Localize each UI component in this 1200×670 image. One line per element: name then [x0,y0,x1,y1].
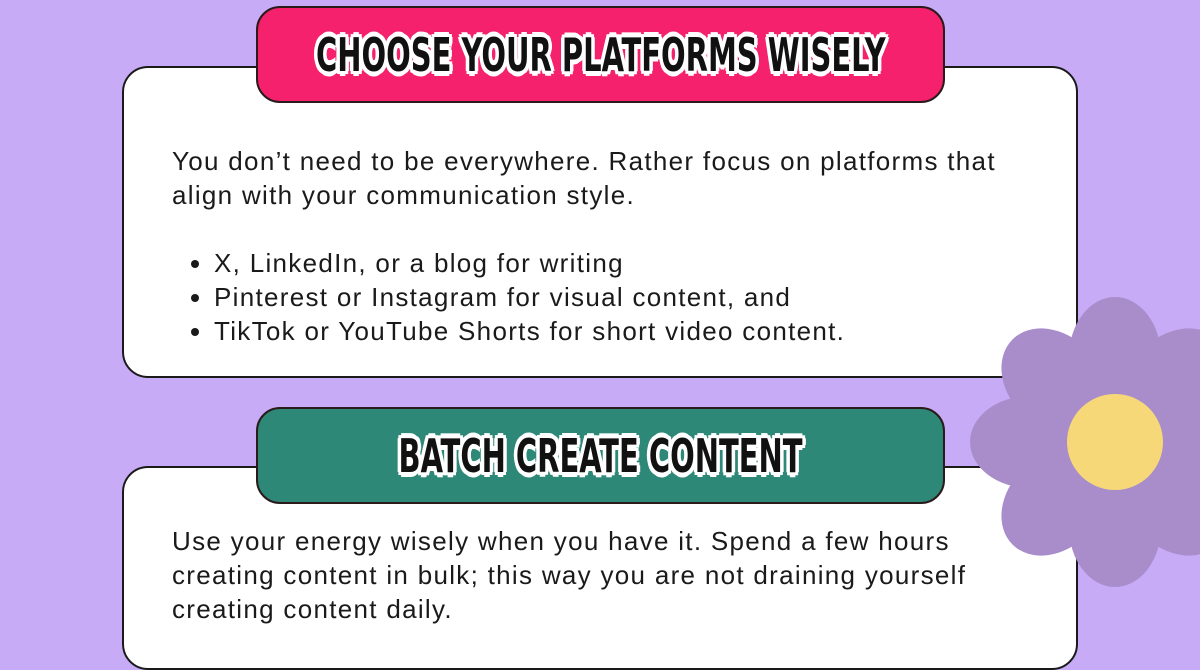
heading: choose your platforms wisely: CHOOSE YOUR PLATFORMS WISELY [316,28,885,82]
heading: choose your platforms wisely [256,6,945,103]
panel: choose platforms [122,66,1078,378]
text block: platforms intro and bullets: You don’t need to be everywhere. Rather focus on platforms that [172,146,996,176]
text block: platforms intro and bullets: TikTok or YouTube Shorts for short video content. [214,316,845,346]
icon: flower [970,297,1200,587]
text block: platforms intro and bullets: X, LinkedIn, or a blog for writing [214,248,624,278]
text block: platforms intro and bullets: Pinterest or Instagram for visual content, and [214,282,791,312]
panel: batch create [122,466,1078,670]
text block: platforms intro and bullets [172,146,996,346]
text block: batch create: creating content in bulk; this way you are not draining yourself [172,560,966,590]
text block: batch create: creating content daily. [172,594,453,624]
text block: batch create: Use your energy wisely when you have it. Spend a few hours [172,526,950,556]
text block: batch create [172,526,966,624]
heading: batch create content [256,407,945,504]
text block: platforms intro and bullets: align with your communication style. [172,180,635,210]
heading: batch create content: BATCH CREATE CONTENT [399,428,802,482]
